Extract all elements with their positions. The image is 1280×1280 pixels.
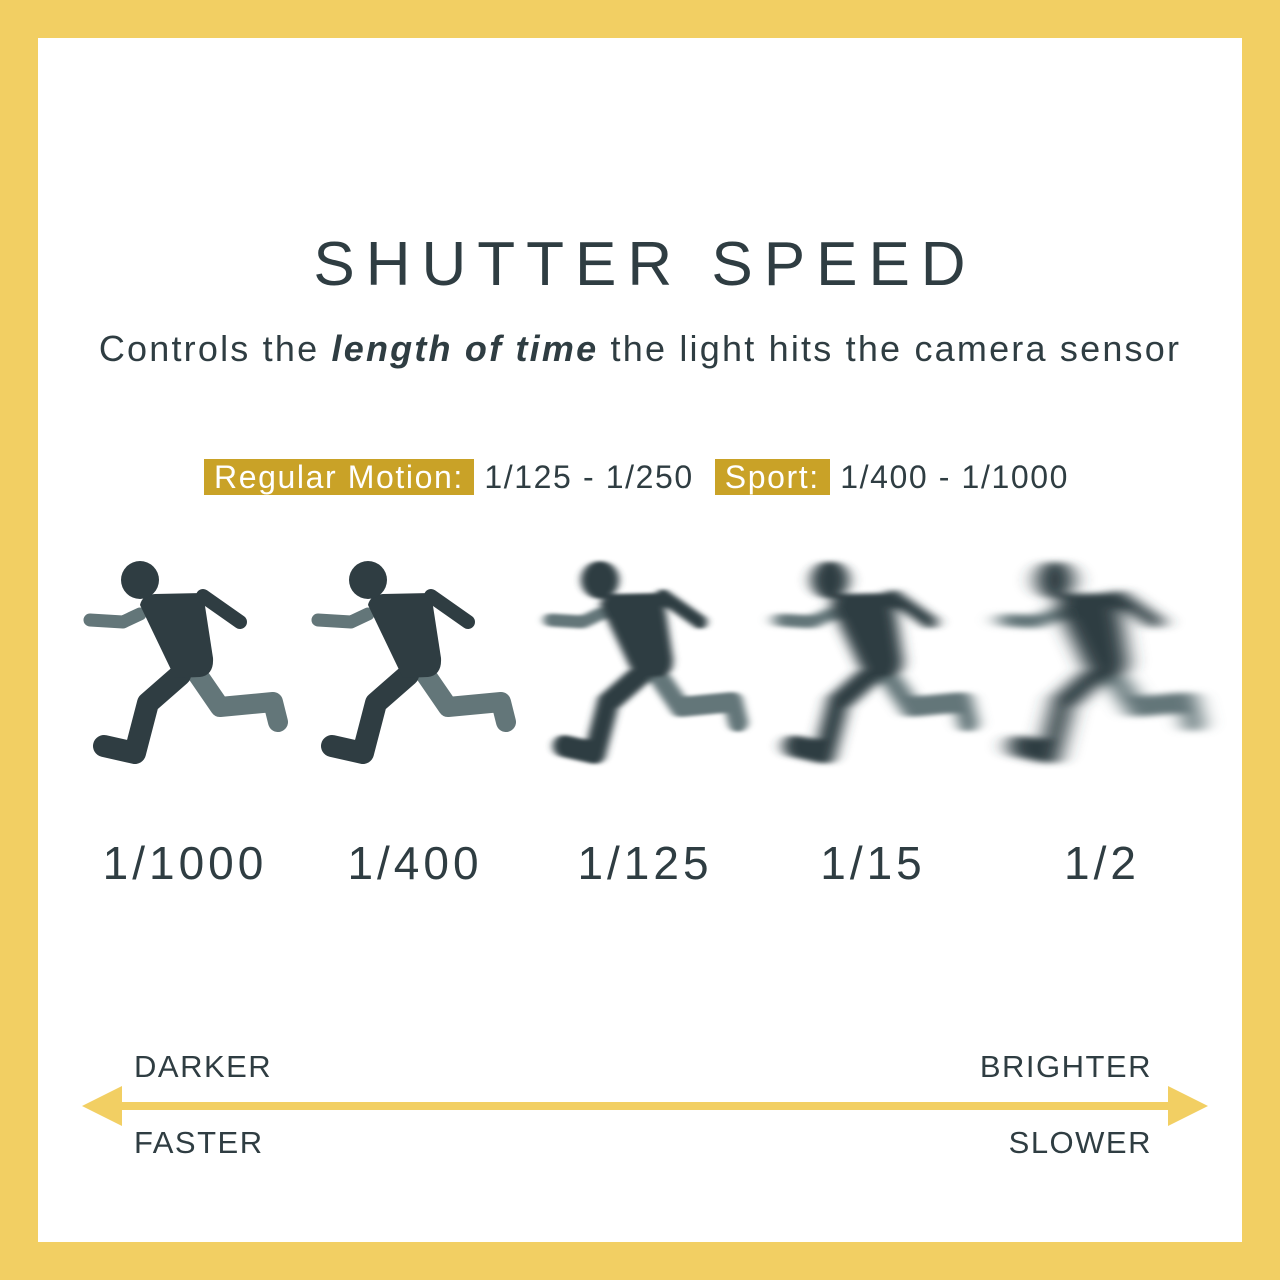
runner 1/400: [318, 561, 506, 753]
title: SHUTTER SPEED: [313, 230, 977, 299]
label 1/2: 1/2: [1064, 837, 1140, 889]
subtitle: Controls the length of time the light hits the camera sensor: [99, 328, 1181, 369]
label 1/1000: 1/1000: [103, 837, 267, 889]
runner 1/125: [550, 561, 738, 753]
runner 1/15: [780, 561, 968, 753]
label 1/125: 1/125: [577, 837, 713, 889]
label faster: FASTER: [134, 1125, 264, 1160]
label brighter: BRIGHTER: [980, 1049, 1152, 1084]
speed labels: [103, 837, 1140, 889]
runner 1/2: [1005, 561, 1193, 753]
arrow: scale: [82, 1086, 1208, 1126]
label 1/400: 1/400: [347, 837, 483, 889]
recommended speeds: Regular Motion: 1/125 - 1/250 Sport: 1/400 - 1/1000: [214, 459, 1069, 495]
label 1/15: 1/15: [820, 837, 926, 889]
label darker: DARKER: [134, 1049, 272, 1084]
runner 1/1000: [90, 561, 278, 753]
label slower: SLOWER: [1009, 1125, 1152, 1160]
runners: [84, 557, 1218, 768]
